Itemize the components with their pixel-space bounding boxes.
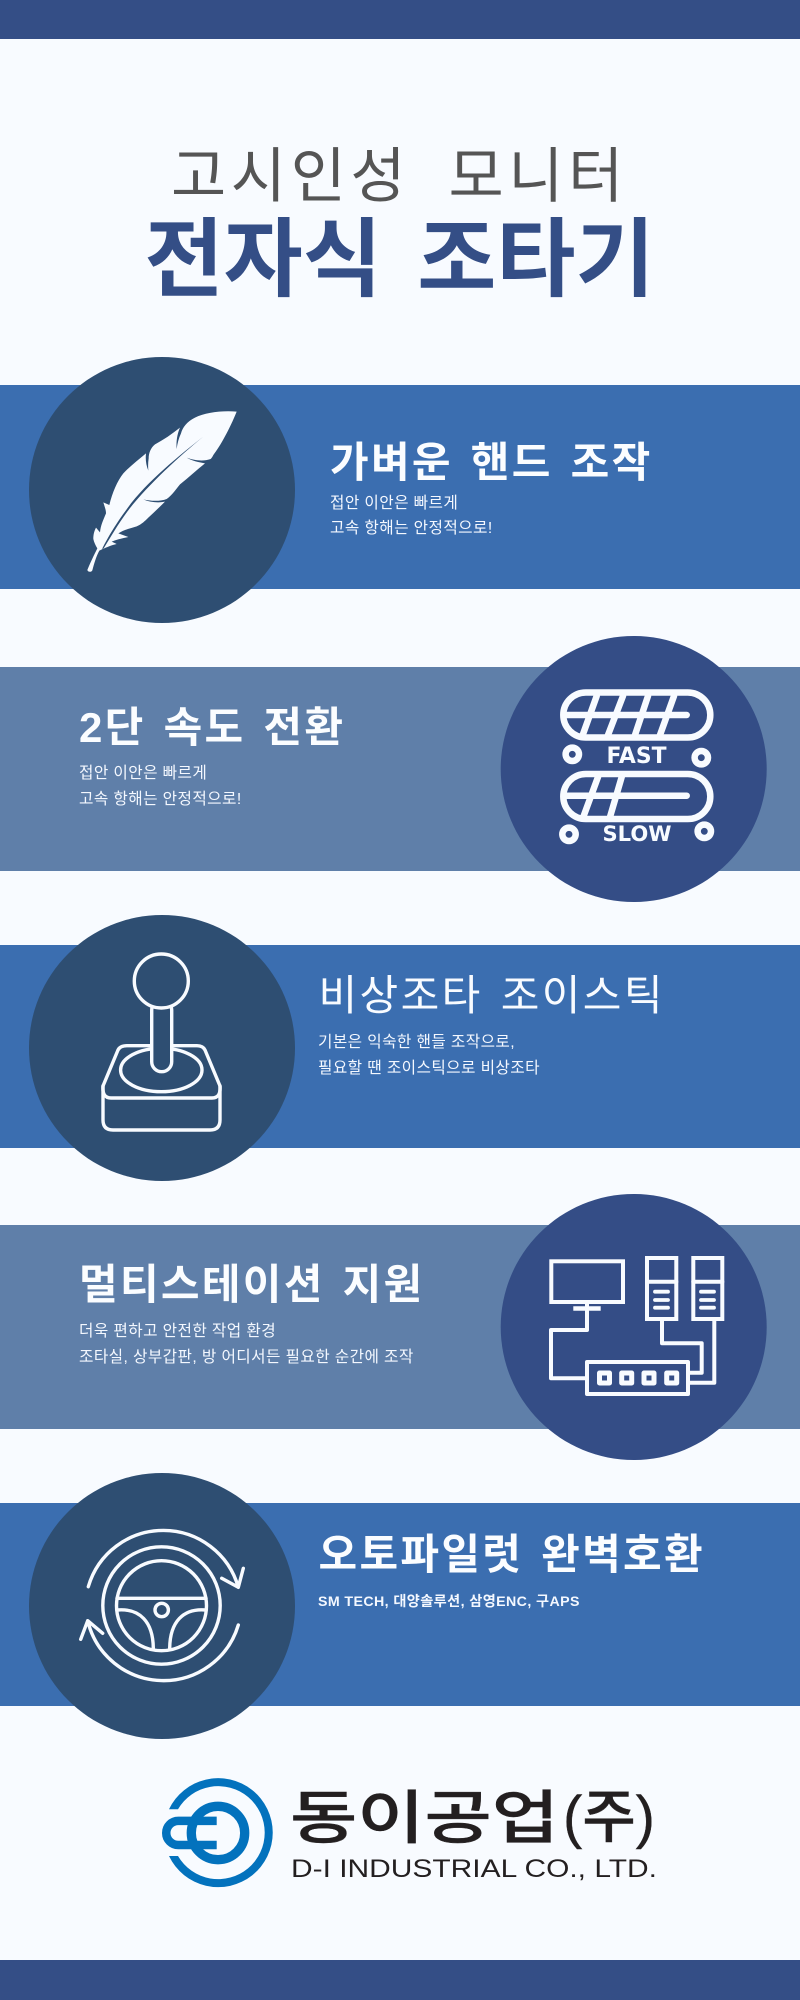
panel: emergency joystick [0, 915, 800, 1181]
panel: light handle [0, 357, 800, 623]
band [0, 945, 800, 1148]
icon: fast and slow throttle: SLOW [602, 822, 672, 846]
title line 1: 고시인성 모니터 [171, 143, 628, 210]
icon: fast and slow throttle: FAST [606, 744, 666, 769]
description: 접안 이안은 빠르게 [330, 494, 458, 512]
heading: 가벼운 핸드 조작 [330, 439, 653, 486]
description: 더욱 편하고 안전한 작업 환경 [79, 1322, 276, 1340]
logo Korean name [290, 1785, 655, 1851]
icon circle [501, 1194, 767, 1460]
icon circle [29, 915, 295, 1181]
title line 2: 전자식 조타기 [144, 212, 655, 308]
logo English name: D-I INDUSTRIAL CO., LTD. [291, 1855, 657, 1883]
top bar [0, 0, 800, 39]
panel: autopilot compatibility [0, 1473, 800, 1739]
description [330, 494, 493, 537]
company logo [166, 1778, 657, 1887]
description [79, 1322, 414, 1366]
icon: joystick [103, 954, 220, 1130]
description: 조타실, 상부갑판, 방 어디서든 필요한 순간에 조작 [79, 1348, 414, 1366]
logo Korean name: 동이공업 [290, 1786, 559, 1851]
title [144, 143, 655, 308]
logo mark [166, 1778, 273, 1887]
band [0, 667, 800, 871]
description: 필요할 땐 조이스틱으로 비상조타 [318, 1059, 540, 1077]
bottom bar [0, 1960, 800, 2000]
icon: network stations [551, 1258, 722, 1394]
band [0, 385, 800, 589]
heading: 오토파일럿 완벽호환 [318, 1531, 705, 1578]
icon circle [501, 636, 767, 902]
panel: multi-station support [0, 1194, 800, 1460]
icon: fast and slow throttle [562, 692, 711, 846]
description: 고속 항해는 안정적으로! [79, 790, 242, 808]
description: 기본은 익숙한 핸들 조작으로, [318, 1033, 515, 1051]
icon: feather [87, 411, 237, 572]
feather shaft [102, 437, 203, 549]
logo Korean name: (주) [563, 1785, 655, 1850]
band [0, 1503, 800, 1706]
heading: 비상조타 조이스틱 [318, 972, 665, 1019]
panel: two-speed switching [0, 636, 800, 902]
icon circle [29, 357, 295, 623]
description: 고속 항해는 안정적으로! [330, 519, 493, 537]
description [79, 764, 242, 808]
icon: steering wheel with arrows [81, 1530, 243, 1681]
description [318, 1033, 540, 1077]
description: SM TECH, 대양솔루션, 삼영ENC, 구APS [318, 1594, 580, 1610]
description: 접안 이안은 빠르게 [79, 764, 207, 782]
band [0, 1225, 800, 1429]
heading: 멀티스테이션 지원 [79, 1261, 424, 1308]
icon circle [29, 1473, 295, 1739]
heading: 2단 속도 전환 [79, 704, 345, 751]
